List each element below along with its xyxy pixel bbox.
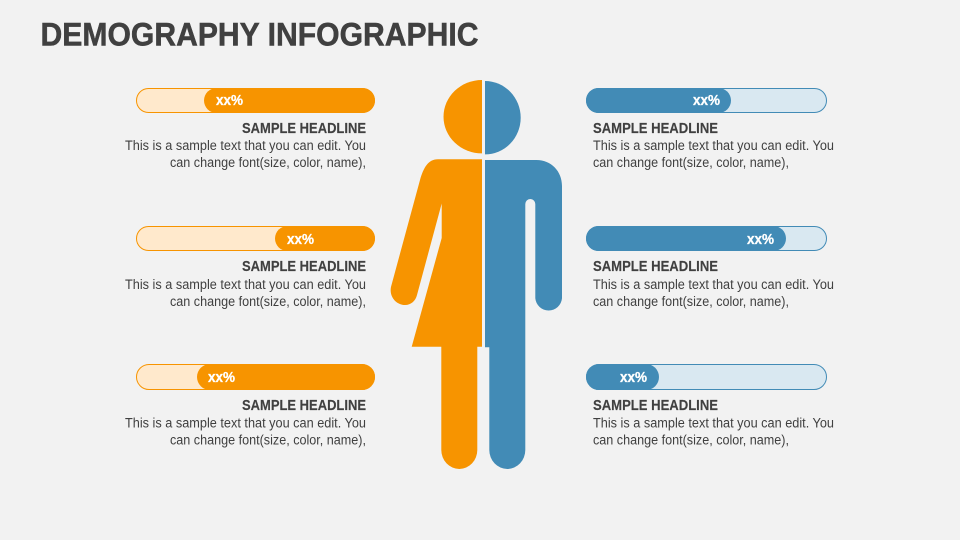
icon: female half: [391, 80, 482, 469]
progress bar: xx%: [216, 93, 243, 109]
headline: SAMPLE HEADLINE: [593, 398, 718, 414]
body text: This is a sample text that you can edit. You: [125, 138, 366, 153]
progress bar: [136, 88, 375, 113]
body text: This is a sample text that you can edit. You: [593, 277, 834, 292]
body text: [593, 277, 834, 309]
progress bar: [136, 364, 375, 390]
title: DEMOGRAPHY INFOGRAPHIC: [40, 17, 478, 53]
panel: left item 1: [125, 88, 375, 170]
icon: male half: [485, 81, 562, 469]
body text: [125, 277, 366, 309]
body text: can change font(size, color, name),: [593, 155, 789, 170]
body text: can change font(size, color, name),: [593, 294, 789, 309]
progress bar: [586, 88, 826, 113]
progress bar: xx%: [208, 370, 235, 386]
progress bar: [586, 364, 826, 390]
body text: can change font(size, color, name),: [593, 432, 789, 448]
body text: [593, 416, 834, 448]
panel: left item 2: [125, 226, 375, 309]
panel: right item 2: [586, 226, 834, 309]
body text: [125, 416, 366, 448]
body text: [125, 138, 366, 170]
progress bar: [586, 226, 826, 251]
central split figure: [391, 80, 562, 469]
panel: right item 3: [586, 364, 834, 448]
panel: left item 3: [125, 364, 375, 448]
body text: This is a sample text that you can edit. You: [125, 277, 366, 292]
body text: can change font(size, color, name),: [170, 294, 366, 309]
headline: SAMPLE HEADLINE: [242, 259, 366, 275]
headline: SAMPLE HEADLINE: [593, 259, 718, 275]
progress bar: xx%: [287, 232, 314, 248]
progress bar: xx%: [747, 232, 774, 248]
body text: [593, 138, 834, 170]
body text: This is a sample text that you can edit. You: [593, 416, 834, 430]
panel: right item 1: [586, 88, 834, 170]
body text: This is a sample text that you can edit. You: [593, 138, 834, 153]
headline: SAMPLE HEADLINE: [242, 398, 366, 414]
body text: can change font(size, color, name),: [170, 432, 366, 448]
progress bar: [136, 226, 375, 251]
body text: This is a sample text that you can edit. You: [125, 416, 366, 430]
headline: SAMPLE HEADLINE: [242, 121, 366, 137]
progress bar: xx%: [620, 370, 647, 386]
progress bar: xx%: [693, 93, 720, 109]
body text: can change font(size, color, name),: [170, 155, 366, 170]
headline: SAMPLE HEADLINE: [593, 121, 718, 137]
